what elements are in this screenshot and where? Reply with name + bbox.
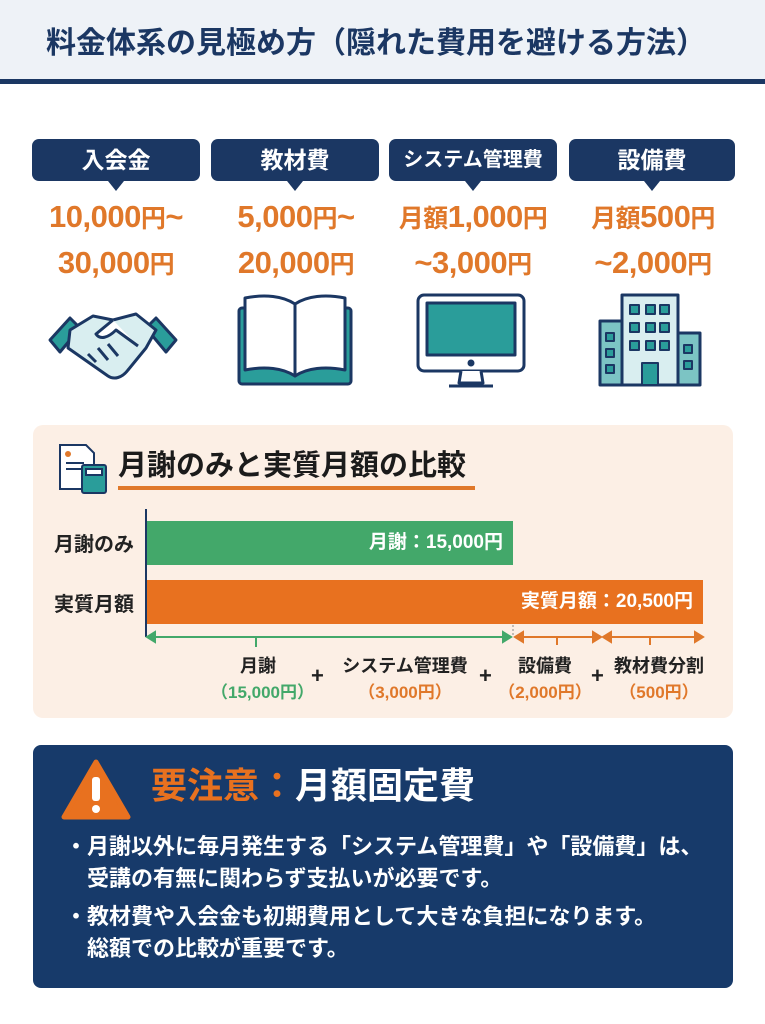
row label: 月謝のみ: 月謝のみ (54, 534, 134, 556)
icon: warning triangle (62, 760, 130, 820)
icon: building (598, 294, 702, 386)
label: 設備費: 設備費 (618, 147, 686, 173)
price: 入会金: 10,000円~ (49, 199, 183, 234)
breakdown labels: （2,000円） (498, 683, 592, 702)
breakdown labels: （3,000円） (358, 683, 452, 702)
price: 入会金: 30,000円 (58, 245, 174, 280)
icon: monitor (416, 294, 526, 388)
label: システム管理費 (389, 139, 557, 181)
row label: 実質月額: 実質月額 (54, 594, 134, 616)
price: システム管理費: 月額1,000円 (399, 199, 547, 234)
breakdown labels: 設備費 (518, 656, 572, 676)
bullet 2: 総額での比較が重要です。 (87, 936, 349, 961)
bullet 1: ・月謝以外に毎月発生する「システム管理費」や「設備費」は、 (65, 834, 702, 859)
price: 教材費 (237, 199, 355, 280)
header band (0, 0, 765, 84)
breakdown labels: （500円） (619, 683, 699, 702)
label: 教材費 (211, 139, 379, 181)
breakdown labels (211, 656, 704, 702)
arrows (145, 625, 705, 647)
title: 料金体系の見極め方（隠れた費用を避ける方法） (46, 27, 706, 60)
icon: handshake (48, 312, 178, 380)
price: 設備費: ~2,000円 (594, 245, 712, 280)
price: システム管理費 (399, 199, 547, 280)
breakdown labels: システム管理費 (342, 656, 468, 676)
price: 教材費: 20,000円 (238, 245, 354, 280)
panel: warning (33, 745, 733, 988)
bar chart (145, 509, 703, 637)
bullet 2: ・教材費や入会金も初期費用として大きな負担になります。 (65, 904, 656, 929)
bar: 実質月額: 実質月額：20,500円 (521, 591, 693, 612)
breakdown labels: 月謝 (240, 656, 276, 676)
price: 設備費 (591, 199, 715, 280)
breakdown labels: + (591, 663, 604, 688)
heading: comparison: 月謝のみと実質月額の比較 (118, 450, 466, 482)
bar: 実質月額 (147, 580, 703, 624)
label: 入会金: 入会金 (82, 147, 150, 173)
bullet 1 (65, 834, 702, 891)
panel: comparison (33, 425, 733, 718)
label: 設備費 (569, 139, 735, 181)
icon: book (238, 294, 352, 386)
label: システム管理費: システム管理費 (403, 149, 543, 171)
bar: 月謝: 月謝：15,000円 (369, 532, 503, 553)
price: 入会金 (49, 199, 183, 280)
heading: warning: 要注意：月額固定費 (151, 765, 475, 806)
bullet 1: 受講の有無に関わらず支払いが必要です。 (87, 866, 502, 891)
price: 教材費: 5,000円~ (237, 199, 355, 234)
breakdown labels: + (311, 663, 324, 688)
label: 入会金 (32, 139, 200, 181)
breakdown labels: + (479, 663, 492, 688)
price: 設備費: 月額500円 (591, 199, 715, 234)
bullet 2 (65, 904, 656, 961)
breakdown labels: 教材費分割 (614, 656, 704, 676)
breakdown labels: （15,000円） (211, 683, 314, 702)
label: 教材費: 教材費 (260, 147, 330, 173)
bar: 月謝 (147, 521, 513, 565)
heading underline (118, 486, 475, 490)
price: システム管理費: ~3,000円 (414, 245, 532, 280)
icon: calculator doc (59, 444, 107, 494)
